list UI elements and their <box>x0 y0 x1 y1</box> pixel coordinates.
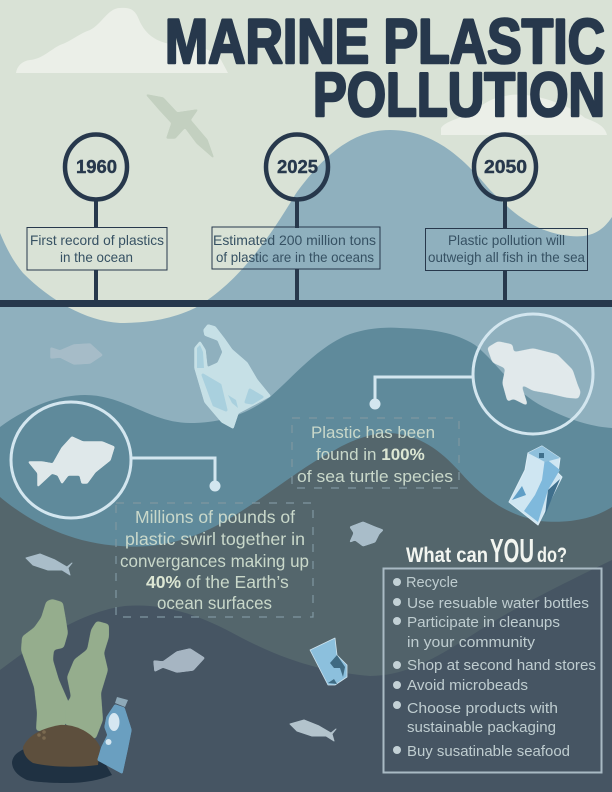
bottle label highlights <box>108 713 120 731</box>
dashed box: sea turtle fact: Plastic has been <box>311 423 435 442</box>
icon: milk carton <box>509 446 562 525</box>
icon: flat fish <box>154 649 204 672</box>
heading: what can you do: do? <box>537 544 567 567</box>
icon: tuna upper <box>26 554 72 575</box>
wave: dark slate <box>0 433 612 792</box>
heading: what can you do: What can <box>406 544 488 567</box>
panel: action list: Avoid microbeads <box>407 677 528 694</box>
timeline: 2025: of plastic are in the oceans <box>216 249 374 265</box>
panel: action list: Shop at second hand stores <box>407 657 596 674</box>
dashed box: sea turtle fact: of sea turtle species <box>297 467 453 486</box>
icon: small fish top <box>51 344 102 364</box>
timeline: 2025: Estimated 200 million tons <box>213 232 376 248</box>
wave: deep navy <box>0 560 612 792</box>
icon: seaweed, rock and bottle <box>12 600 131 783</box>
panel: action list: Participate in cleanups <box>407 614 560 631</box>
timeline: 2050 <box>426 134 588 302</box>
title <box>165 7 605 130</box>
callout: fish <box>11 402 220 518</box>
icon: seagull <box>147 95 213 157</box>
timeline: 1960: First record of plastics <box>30 232 164 248</box>
timeline: 2025: 2025 <box>277 157 318 177</box>
icon: plastic bag <box>195 325 270 428</box>
dashed box: convergence fact: Millions of pounds of <box>135 507 295 527</box>
wave: mid teal <box>0 328 612 792</box>
timeline: 2050: 2050 <box>484 157 527 177</box>
timeline axis <box>0 300 612 307</box>
dashed box: convergence fact: convergances making up <box>120 551 309 571</box>
panel: action list <box>384 568 602 772</box>
timeline: 2025 <box>212 134 380 302</box>
panel: action list: Buy susatinable seafood <box>407 743 570 760</box>
bottle cap <box>115 697 128 707</box>
panel: action list: sustainable packaging <box>407 719 556 736</box>
icon: angelfish <box>350 522 383 546</box>
dashed box: convergence fact: 40% of the Earth’s <box>146 572 289 592</box>
icon: tuna lower <box>290 720 336 741</box>
dashed box: convergence fact: plastic swirl together in <box>125 529 305 549</box>
timeline: 1960 <box>27 134 167 302</box>
timeline: 1960: in the ocean <box>60 249 133 265</box>
plastic bottle <box>98 705 131 773</box>
rock shadow <box>12 749 112 783</box>
dashed box: convergence fact: ocean surfaces <box>157 593 272 613</box>
seaweed left frond <box>22 600 68 730</box>
icon: crushed cup <box>310 638 347 685</box>
panel: pale sky <box>0 0 612 323</box>
heading: what can you do: YOU <box>490 532 534 569</box>
dashed box: sea turtle fact <box>292 418 459 488</box>
seaweed right frond <box>65 622 108 738</box>
rock pebbles <box>37 730 46 740</box>
panel: action list: Choose products with <box>407 700 558 717</box>
timeline: 2050: outweigh all fish in the sea <box>428 249 585 265</box>
callout: turtle <box>370 314 593 434</box>
dashed box: sea turtle fact: found in 100% <box>316 445 425 464</box>
panel: action list: Use resuable water bottles <box>407 595 589 612</box>
dashed box: convergence fact <box>116 503 313 617</box>
rock <box>23 725 100 767</box>
panel: action list: Recycle <box>406 574 458 591</box>
panel: action list: in your community <box>407 634 536 651</box>
heading: what can you do <box>406 532 567 569</box>
cloud right <box>441 95 607 135</box>
timeline: 2050: Plastic pollution will <box>448 232 565 248</box>
cloud left <box>16 8 228 73</box>
timeline: 1960: 1960 <box>76 157 117 177</box>
